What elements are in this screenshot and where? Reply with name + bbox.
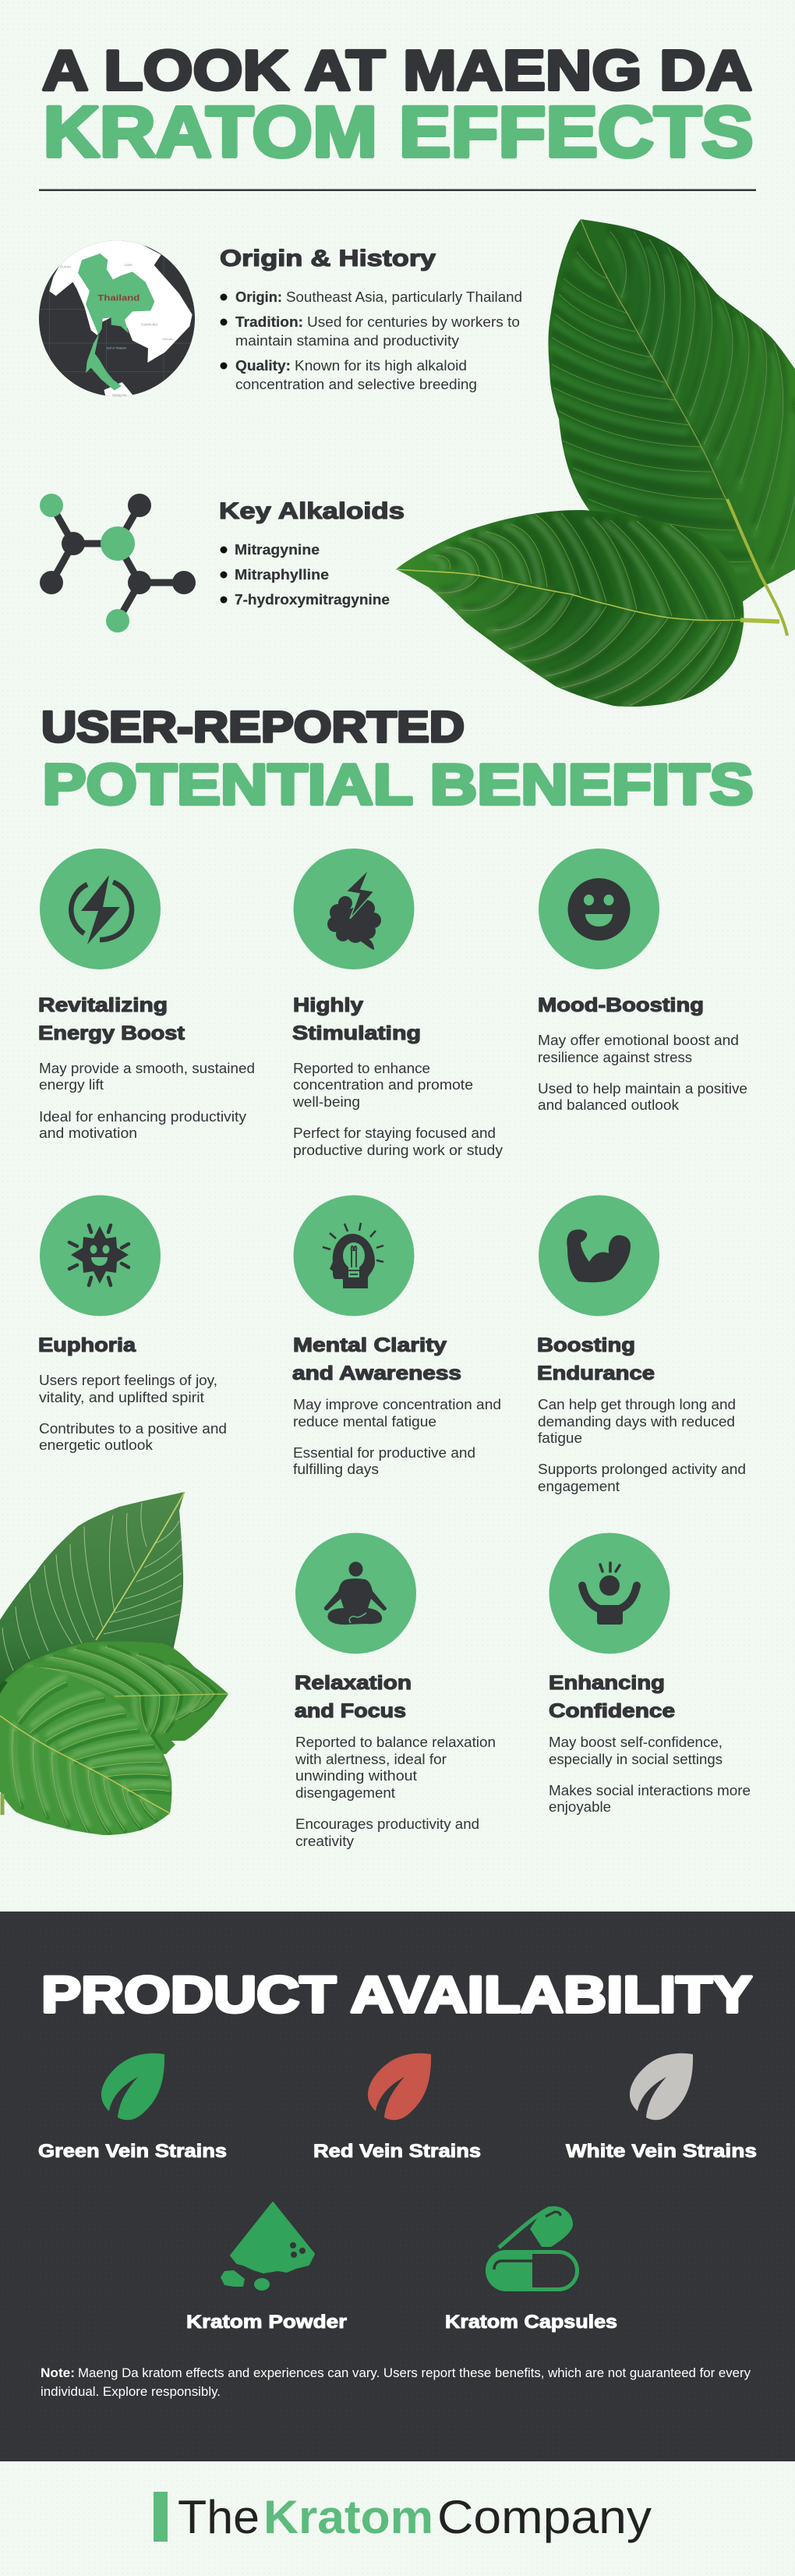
icon: white vein leaf xyxy=(630,2053,693,2120)
panel: origin and history xyxy=(220,246,522,392)
note xyxy=(41,2365,751,2399)
title: A LOOK AT MAENG DA xyxy=(42,40,752,102)
heading: key alkaloids: Key Alkaloids xyxy=(219,498,405,524)
alkaloid list: Mitraphylline xyxy=(235,567,329,583)
panel: product availability xyxy=(0,1912,795,2461)
logo: The Kratom Company: Kratom xyxy=(263,2491,433,2543)
icon: green vein leaf xyxy=(101,2053,164,2120)
benefit: enhancing confidence xyxy=(549,1533,751,1815)
map: Thailand: Thailand xyxy=(97,293,140,303)
map: Thailand: Vietnam xyxy=(162,338,173,341)
benefit: mood-boosting: May offer emotional boost and xyxy=(538,1033,739,1048)
map: Thailand: Laos xyxy=(125,263,132,267)
benefit: highly stimulating: well-being xyxy=(292,1094,360,1110)
bullet list: maintain stamina and productivity xyxy=(235,333,459,349)
benefit: boosting endurance: Endurance xyxy=(537,1362,655,1384)
lower leaf xyxy=(390,507,779,710)
panel: product availability: Green Vein Strains xyxy=(38,2141,227,2162)
benefit: relaxation and focus: Relaxation xyxy=(295,1672,412,1694)
benefit: relaxation and focus: and Focus xyxy=(295,1700,406,1722)
benefit: mood-boosting: Mood-Boosting xyxy=(538,994,704,1016)
heading: user-reported potential benefits xyxy=(41,702,753,817)
benefit: boosting endurance: Can help get through long and xyxy=(538,1397,736,1412)
icon: euphoric burst xyxy=(40,1195,161,1316)
benefit: boosting endurance: fatigue xyxy=(538,1430,582,1446)
benefit: highly stimulating: productive during work or study xyxy=(293,1143,503,1158)
benefit: boosting endurance: Supports prolonged activity and xyxy=(538,1462,746,1477)
benefit: mental clarity and awareness: Mental Clarity xyxy=(293,1334,447,1356)
benefit: highly stimulating: Stimulating xyxy=(292,1022,421,1044)
benefit: mood-boosting: Used to help maintain a positive xyxy=(538,1081,747,1097)
benefit: euphoria: vitality, and uplifted spirit xyxy=(39,1390,204,1405)
benefit: mood-boosting: resilience against stress xyxy=(538,1050,692,1065)
bullet list xyxy=(220,289,522,392)
icon: meditating person xyxy=(295,1533,416,1653)
note: individual. Explore responsibly. xyxy=(41,2384,221,2399)
benefit: mental clarity and awareness: reduce mental fatigue xyxy=(293,1414,436,1430)
bullet list: Tradition: xyxy=(235,314,303,330)
benefit: highly stimulating xyxy=(292,849,503,1158)
benefit: enhancing confidence: Makes social interactions more xyxy=(549,1783,751,1798)
heading: product availability: PRODUCT AVAILABILITY xyxy=(41,1966,752,2023)
benefit: relaxation and focus: creativity xyxy=(295,1834,354,1849)
title xyxy=(42,40,753,172)
heading: user-reported potential benefits: POTENTIAL BENEFITS xyxy=(42,752,753,817)
upper leaf xyxy=(546,214,795,636)
benefit: mood-boosting xyxy=(538,849,747,1113)
bullet list: Origin: xyxy=(235,289,282,305)
note: Note: xyxy=(41,2365,75,2380)
logo: The Kratom Company xyxy=(154,2491,652,2543)
benefit: euphoria: Euphoria xyxy=(38,1334,136,1356)
panel: product availability: Kratom Powder xyxy=(186,2312,347,2333)
icon: red vein leaf xyxy=(368,2053,431,2120)
benefit: mental clarity and awareness: Essential for productive and xyxy=(293,1445,475,1461)
benefit: relaxation and focus: with alertness, ideal for xyxy=(295,1752,447,1767)
bullet list: Known for its high alkaloid xyxy=(295,358,467,374)
middle leaf xyxy=(0,1638,230,1763)
icon: smiley xyxy=(539,849,659,969)
map: Thailand: Gulf of Thailand xyxy=(106,347,126,350)
benefit: enhancing confidence: especially in social settings xyxy=(549,1752,723,1767)
benefit: mental clarity and awareness: fulfilling days xyxy=(293,1462,379,1477)
icon: flexed arm xyxy=(539,1195,659,1316)
heading: user-reported potential benefits: USER-REPORTED xyxy=(41,702,465,751)
bullet list: Quality: xyxy=(235,358,291,374)
alkaloid list: 7-hydroxymitragynine xyxy=(235,592,390,608)
alkaloid list: Mitragynine xyxy=(235,542,320,558)
map: Thailand xyxy=(39,236,195,400)
benefit: revitalizing energy boost: and motivation xyxy=(39,1125,137,1141)
back leaf xyxy=(0,1491,186,1685)
leaves bottom left xyxy=(0,1486,230,1841)
benefit: mental clarity and awareness: and Awareness xyxy=(292,1362,461,1384)
icon: lightning in ring xyxy=(40,849,161,969)
benefit: relaxation and focus: disengagement xyxy=(295,1785,395,1801)
icon: molecule xyxy=(40,494,196,632)
front leaf xyxy=(0,1661,175,1841)
benefit: relaxation and focus: Reported to balance relaxation xyxy=(295,1734,496,1750)
map: Thailand: Cambodia xyxy=(141,323,157,327)
benefit: enhancing confidence: Enhancing xyxy=(549,1672,665,1694)
alkaloid list xyxy=(220,542,390,608)
panel: product availability: Kratom Capsules xyxy=(445,2312,617,2333)
map: Thailand: Malaysia xyxy=(112,393,127,397)
bullet list: Southeast Asia, particularly Thailand xyxy=(286,289,522,305)
benefit: boosting endurance xyxy=(537,1195,746,1494)
benefit: revitalizing energy boost: Revitalizing xyxy=(38,994,168,1016)
benefit: enhancing confidence: May boost self-confidence, xyxy=(549,1734,723,1750)
benefit: mental clarity and awareness xyxy=(292,1195,501,1477)
benefit: revitalizing energy boost: Ideal for enhancing productivity xyxy=(39,1109,246,1125)
benefit: boosting endurance: engagement xyxy=(538,1479,620,1494)
note: Maeng Da kratom effects and experiences can vary. Users report these benefits, which are not guaranteed for every xyxy=(78,2365,751,2380)
benefit: revitalizing energy boost: Energy Boost xyxy=(38,1022,186,1044)
map: Thailand: Burma xyxy=(60,264,71,268)
benefit: revitalizing energy boost: energy lift xyxy=(39,1077,104,1093)
benefit: euphoria: Users report feelings of joy, xyxy=(39,1373,217,1388)
benefit: highly stimulating: concentration and promote xyxy=(293,1077,473,1093)
benefit: euphoria: energetic outlook xyxy=(39,1437,154,1453)
benefit: enhancing confidence: enjoyable xyxy=(549,1799,611,1815)
benefit: relaxation and focus: Encourages productivity and xyxy=(295,1816,479,1832)
benefit: boosting endurance: demanding days with reduced xyxy=(538,1414,735,1430)
icon: confident person xyxy=(549,1533,670,1653)
benefit: relaxation and focus xyxy=(295,1533,496,1849)
benefit: mental clarity and awareness: May improve concentration and xyxy=(293,1397,501,1412)
benefit: highly stimulating: Reported to enhance xyxy=(293,1061,430,1076)
icon: kratom powder xyxy=(221,2202,314,2291)
icon: brain with lightning xyxy=(293,849,415,969)
benefit: revitalizing energy boost: May provide a smooth, sustained xyxy=(39,1061,255,1076)
benefit: euphoria xyxy=(38,1195,227,1453)
benefit: euphoria: Contributes to a positive and xyxy=(39,1421,227,1437)
big leaf top right xyxy=(390,214,795,710)
benefit: boosting endurance: Boosting xyxy=(537,1334,635,1356)
benefit: highly stimulating: Perfect for staying focused and xyxy=(293,1125,496,1141)
bullet list: concentration and selective breeding xyxy=(235,377,477,392)
panel: product availability: White Vein Strains xyxy=(566,2141,757,2162)
benefit: mood-boosting: and balanced outlook xyxy=(538,1097,680,1113)
benefit: relaxation and focus: unwinding without xyxy=(295,1768,417,1784)
panel: key alkaloids xyxy=(219,498,405,608)
heading: origin and history: Origin & History xyxy=(220,246,436,271)
icon: head with light bulb xyxy=(293,1195,415,1316)
logo: The Kratom Company: Company xyxy=(437,2491,652,2543)
logo: The Kratom Company: The xyxy=(178,2491,260,2543)
benefit: enhancing confidence: Confidence xyxy=(549,1700,675,1722)
title: KRATOM EFFECTS xyxy=(44,92,753,172)
icon: kratom capsules xyxy=(486,2206,577,2291)
benefit: highly stimulating: Highly xyxy=(293,994,363,1016)
benefit: revitalizing energy boost xyxy=(38,849,255,1141)
panel: product availability: Red Vein Strains xyxy=(313,2141,481,2162)
bullet list: Used for centuries by workers to xyxy=(307,314,520,330)
